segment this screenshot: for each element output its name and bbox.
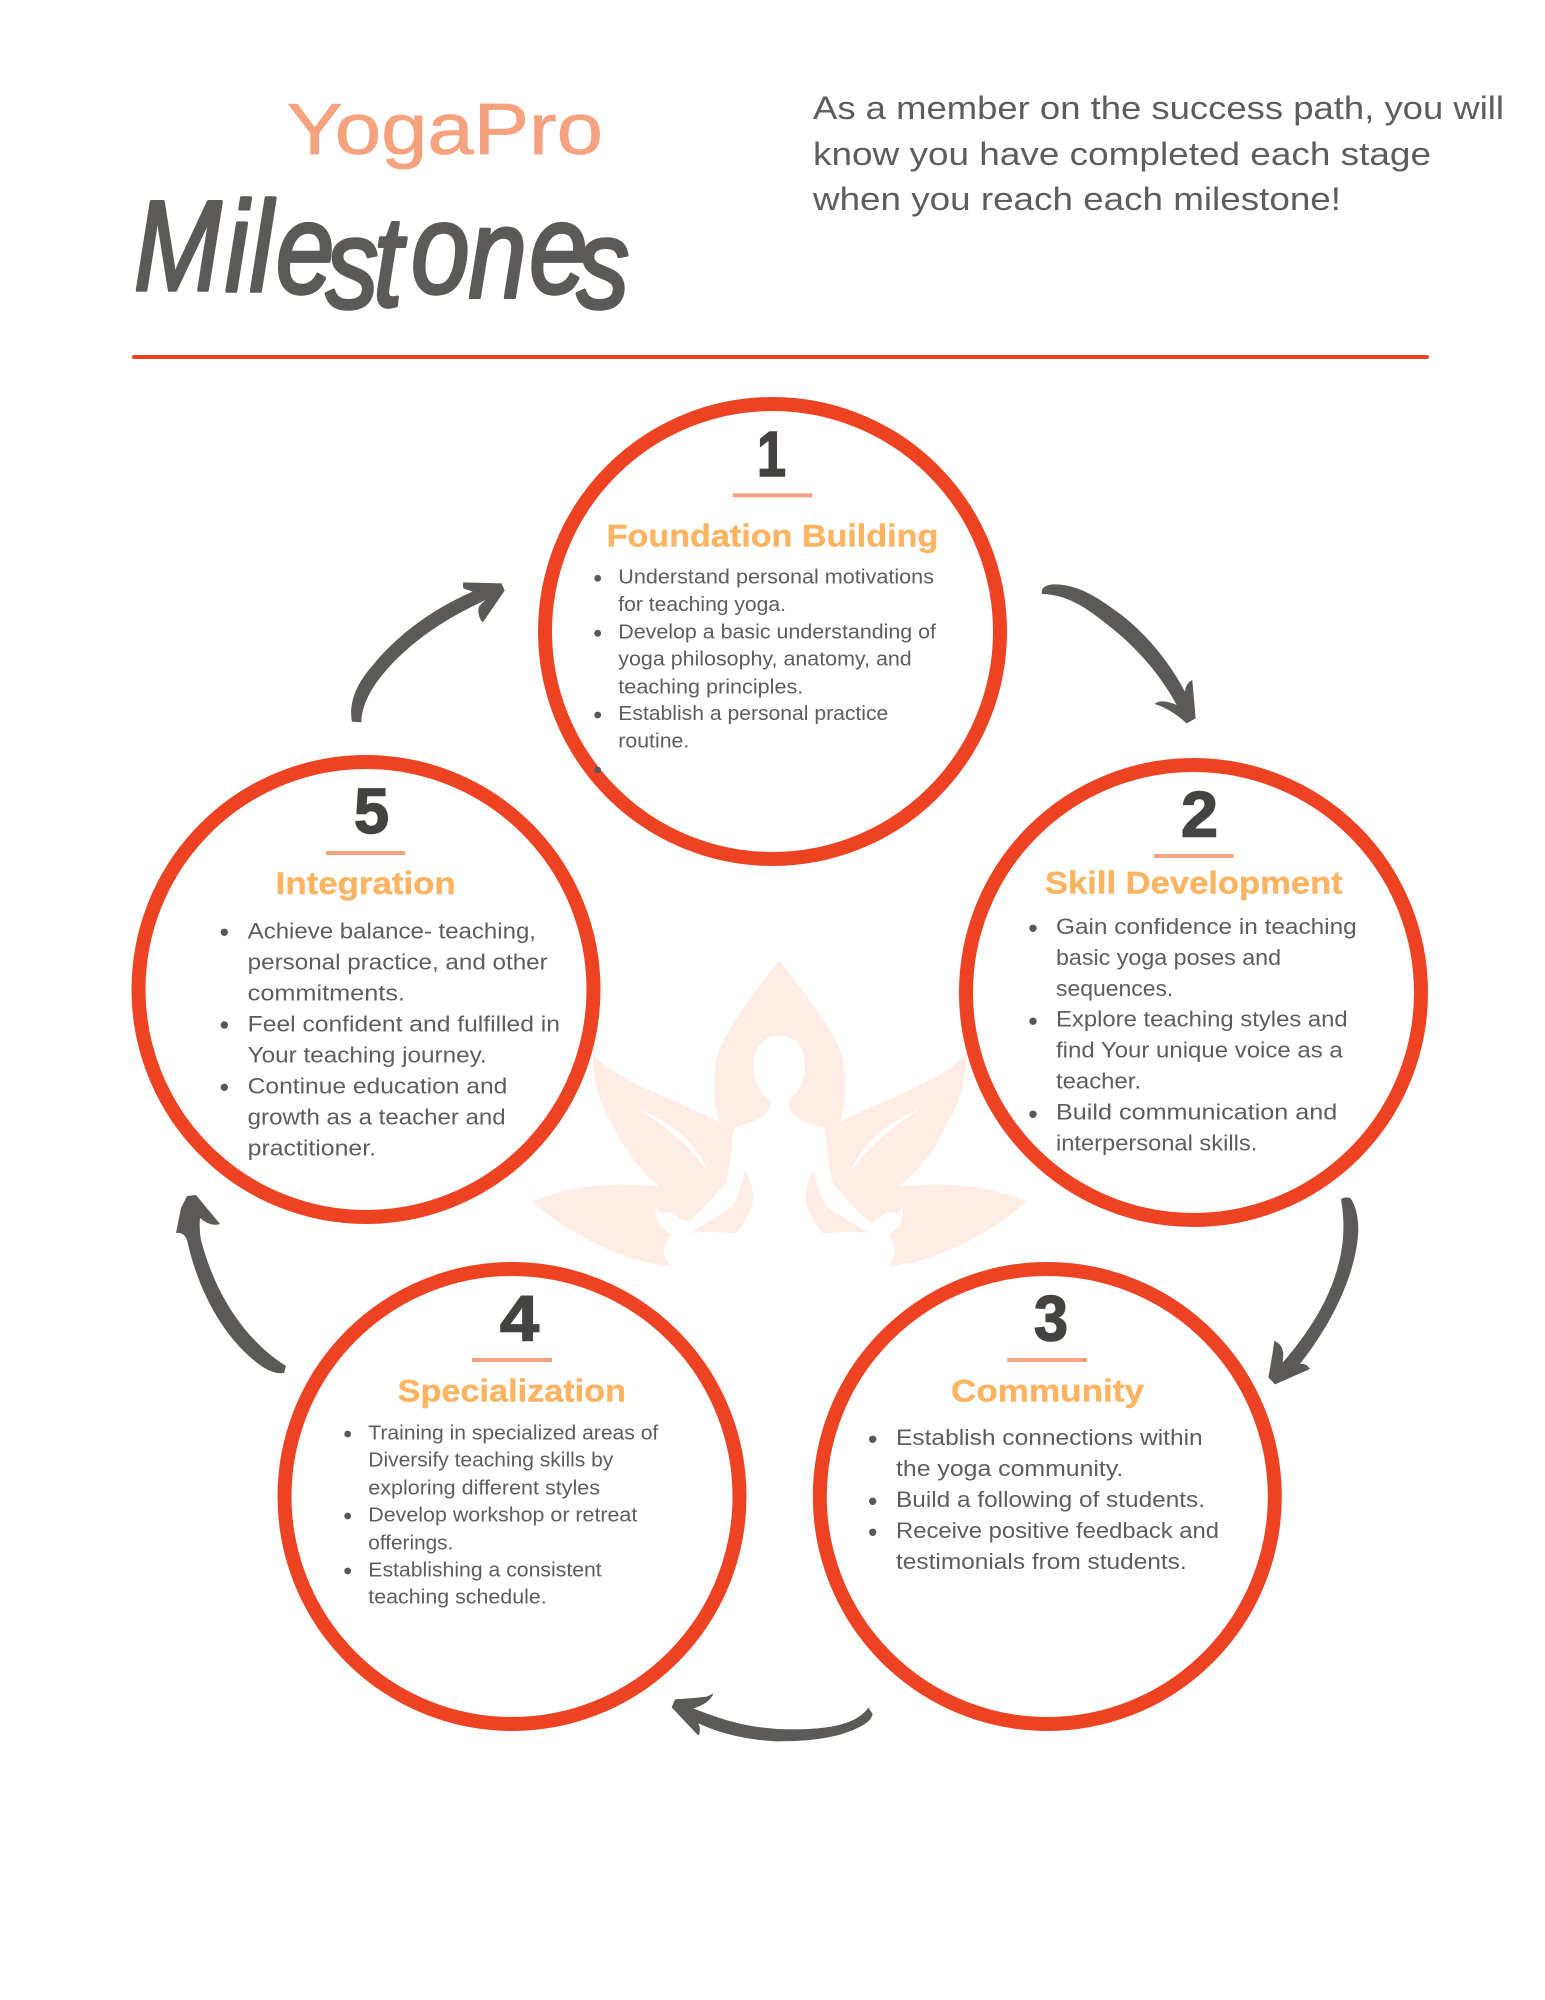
bullet list: Build a following of students. <box>896 1487 1205 1512</box>
number underline <box>1154 854 1233 858</box>
step number 4: 4 <box>500 1283 539 1355</box>
step number 5: 5 <box>354 775 389 847</box>
bullet list: teaching principles. <box>618 676 803 698</box>
arrow: step 3 to step 4 <box>672 1693 873 1741</box>
bullet list: the yoga community. <box>896 1456 1123 1481</box>
intro text block: As a member on the success path, you will <box>813 90 1504 126</box>
panel: step 5 Integration <box>138 762 594 1217</box>
bullet list: Develop workshop or retreat <box>368 1505 638 1527</box>
icon: lotus with meditating figure <box>533 961 1026 1267</box>
bullet list: teaching schedule. <box>368 1586 547 1608</box>
bullet list: offerings. <box>368 1532 453 1554</box>
step heading: Skill Development <box>1045 864 1343 900</box>
bullet list: sequences. <box>1056 976 1173 1001</box>
bullet list: practitioner. <box>248 1135 376 1160</box>
bullet list: exploring different styles <box>368 1477 600 1499</box>
bullet list: testimonials from students. <box>896 1549 1187 1574</box>
bullet list <box>344 1422 659 1608</box>
arrow: step 1 to step 2 <box>1042 584 1196 723</box>
intro text block: know you have completed each stage <box>813 136 1431 172</box>
step number 3: 3 <box>1034 1283 1068 1355</box>
bullet list: Your teaching journey. <box>248 1042 487 1067</box>
bullet list: yoga philosophy, anatomy, and <box>618 649 912 671</box>
bullet list: Understand personal motivations <box>618 566 934 588</box>
bullet list: Diversify teaching skills by <box>368 1450 613 1472</box>
bullet list: Feel confident and fulfilled in <box>248 1011 560 1036</box>
bullet list: personal practice, and other <box>248 949 548 974</box>
brand heading: YogaPro: YogaPro <box>287 90 603 170</box>
bullet list: Continue education and <box>248 1073 507 1098</box>
bullet list: teacher. <box>1056 1069 1141 1094</box>
bullet list: interpersonal skills. <box>1056 1131 1257 1156</box>
bullet list: Establish a personal practice <box>618 703 888 725</box>
title: Milestones: Milestones <box>134 174 629 335</box>
bullet list <box>869 1425 1219 1574</box>
intro text block: when you reach each milestone! <box>812 181 1341 217</box>
bullet list: Build communication and <box>1056 1100 1337 1125</box>
step number 2: 2 <box>1181 779 1218 851</box>
step heading: Foundation Building <box>607 518 938 554</box>
panel: step 2 Skill Development <box>966 765 1421 1220</box>
bullet list <box>221 918 560 1160</box>
bullet list <box>1029 914 1357 1156</box>
step heading: Specialization <box>398 1373 626 1409</box>
bullet list: routine. <box>618 731 689 753</box>
bullet list: Training in specialized areas of <box>368 1422 659 1444</box>
bullet list: Explore teaching styles and <box>1056 1007 1348 1032</box>
number underline <box>326 851 405 855</box>
bullet list: Establish connections within <box>896 1425 1203 1450</box>
bullet list: Establishing a consistent <box>368 1560 602 1582</box>
step number 1: 1 <box>757 418 786 490</box>
arrow: step 5 to step 1 <box>351 582 505 722</box>
bullet list: Develop a basic understanding of <box>618 621 936 643</box>
header divider line <box>132 355 1429 359</box>
number underline <box>1007 1358 1087 1362</box>
bullet list: Receive positive feedback and <box>896 1518 1219 1543</box>
bullet list: for teaching yoga. <box>618 594 786 616</box>
bullet list: find Your unique voice as a <box>1056 1038 1343 1063</box>
bullet list <box>594 566 936 773</box>
bullet list: Gain confidence in teaching <box>1056 914 1357 939</box>
number underline <box>733 493 812 497</box>
panel: step 1 Foundation Building <box>545 404 1000 859</box>
bullet list: commitments. <box>248 980 405 1005</box>
step heading: Integration <box>276 865 456 901</box>
arrow: step 2 to step 3 <box>1268 1197 1358 1384</box>
panel: step 3 Community <box>820 1269 1275 1724</box>
arrow: step 4 to step 5 <box>176 1195 286 1373</box>
bullet list: basic yoga poses and <box>1056 945 1281 970</box>
bullet list: growth as a teacher and <box>248 1104 506 1129</box>
intro text block <box>812 90 1504 217</box>
panel: step 4 Specialization <box>284 1269 740 1724</box>
number underline <box>472 1358 552 1362</box>
bullet list: Achieve balance- teaching, <box>248 918 536 943</box>
step heading: Community <box>951 1373 1145 1409</box>
